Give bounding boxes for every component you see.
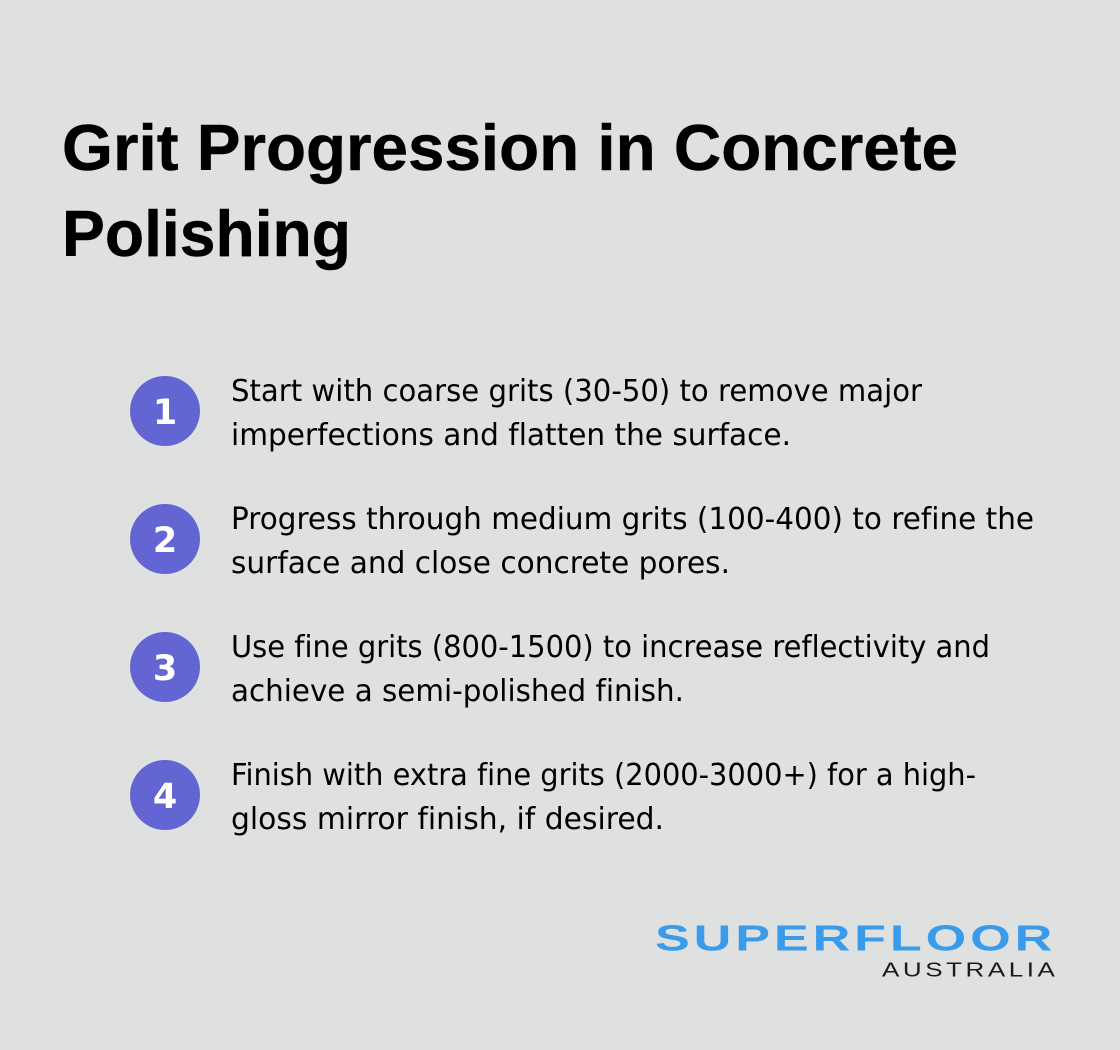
step 1 text	[231, 374, 923, 453]
step 4 text: gloss mirror finish, if desired.	[231, 802, 664, 837]
step 3	[130, 630, 990, 709]
title	[62, 111, 958, 270]
step 1 number badge: 1	[153, 393, 177, 433]
step 1 text: Start with coarse grits (30-50) to remove major	[231, 374, 923, 409]
logo: Superfloor Australia	[655, 918, 1055, 981]
step 4 text	[231, 758, 976, 837]
step 4	[130, 758, 976, 837]
step 2 number badge	[130, 504, 200, 574]
title: Polishing	[62, 197, 351, 270]
logo: Superfloor Australia: SUPERFLOOR	[655, 918, 1052, 959]
step 3 number badge: 3	[153, 649, 177, 689]
step 2 number badge: 2	[153, 521, 177, 561]
step 4 number badge	[130, 760, 200, 830]
step 2 text: Progress through medium grits (100-400) to refine the	[231, 502, 1034, 537]
step 3 text	[231, 630, 990, 709]
step 3 number badge	[130, 632, 200, 702]
step 3 text: achieve a semi-polished finish.	[231, 674, 684, 709]
step 1 text: imperfections and flatten the surface.	[231, 418, 791, 453]
step 1	[130, 374, 923, 453]
step 4 text: Finish with extra fine grits (2000-3000+) for a high-	[231, 758, 976, 793]
step 3 text: Use fine grits (800-1500) to increase reflectivity and	[231, 630, 990, 665]
step 4 number badge: 4	[153, 777, 177, 817]
logo: Superfloor Australia: AUSTRALIA	[882, 958, 1055, 981]
step 2 text: surface and close concrete pores.	[231, 546, 730, 581]
step 2 text	[231, 502, 1034, 581]
step 1 number badge	[130, 376, 200, 446]
title: Grit Progression in Concrete	[62, 111, 958, 184]
step 2	[130, 502, 1034, 581]
